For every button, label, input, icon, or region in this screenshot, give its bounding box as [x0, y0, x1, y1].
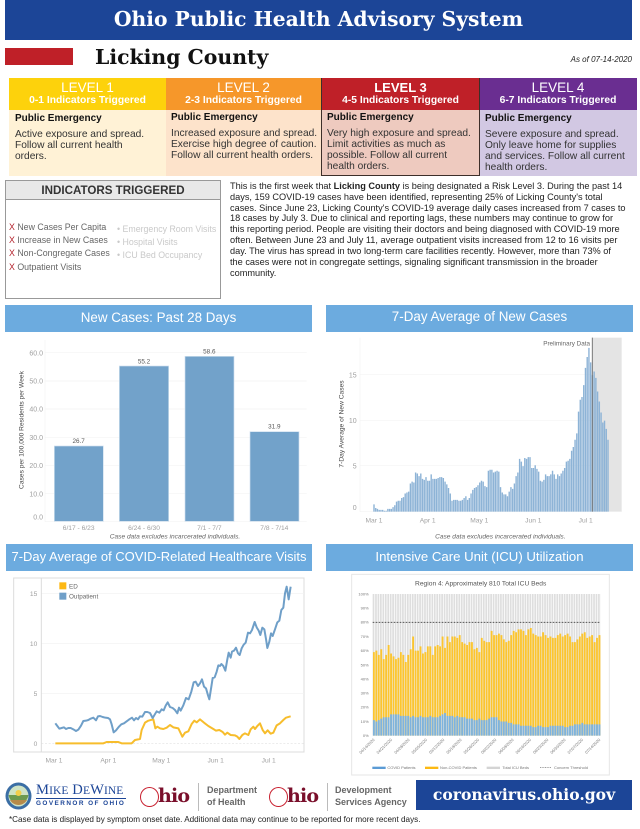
x axis labels: Apr 1 — [100, 758, 117, 765]
y axis labels: 15 — [349, 372, 357, 379]
x axis labels: Mar 1 — [365, 518, 383, 525]
summary paragraph — [230, 181, 626, 278]
level 4 column: Only leave home for supplies — [485, 140, 616, 151]
governor logo text: GOVERNOR OF OHIO — [36, 800, 125, 807]
level 1 column — [9, 78, 166, 176]
footnote: *Case data is displayed by symptom onset date. Additional data may continue to be reported for more recent days. — [9, 815, 420, 824]
y axis labels: 50% — [361, 662, 369, 667]
chart note: Case data excludes incarcerated individuals. — [110, 534, 240, 541]
x axis labels: 7/1 - 7/7 — [197, 525, 222, 532]
summary paragraph: cases. Since June 23, Licking County's COVID-19 average daily cases increased from 7 cases to — [230, 203, 625, 213]
bar value labels: 31.9 — [268, 424, 281, 431]
legend: Concern Threshold — [554, 765, 588, 770]
level 2 column: Public Emergency — [171, 112, 258, 123]
preliminary data marker: Preliminary Data — [543, 340, 590, 347]
level 2 column — [166, 78, 321, 176]
level 3 column (current level, outlined): Public Emergency — [327, 112, 414, 123]
y axis labels: 0% — [363, 733, 369, 738]
triggered indicators list — [9, 222, 110, 272]
date axis labels: 06/16/2020 — [514, 737, 533, 755]
level 4 column: 6-7 Indicators Triggered — [500, 95, 616, 106]
date axis labels: 07/07/2020 — [566, 737, 585, 755]
level 4 column: Public Emergency — [485, 113, 572, 124]
x axis labels: Jul 1 — [262, 758, 276, 765]
bar value labels: 26.7 — [73, 438, 85, 445]
summary paragraph: This is the first week that Licking County is being designated a Risk Level 3. During the past 14 — [230, 181, 622, 191]
occupied bed bars — [374, 628, 599, 736]
level 1 column: Active exposure and spread. — [15, 129, 144, 140]
date axis labels: 05/26/2020 — [462, 737, 481, 755]
bar value labels — [73, 348, 281, 445]
level 3 column (current level, outlined) — [321, 78, 480, 176]
level 3 column (current level, outlined): Limit activities as much as — [327, 139, 445, 150]
level 3 column (current level, outlined): Very high exposure and spread. — [327, 128, 471, 139]
Ohio Development Services Agency logo: Services Agency — [335, 796, 407, 806]
y axis labels: 70% — [361, 634, 369, 639]
triggered indicators list: X Non-Congregate Cases — [9, 248, 110, 258]
y axis labels — [29, 350, 43, 522]
level 1 column: orders. — [15, 151, 47, 162]
governor logo text: MIKE DEWINE — [36, 782, 123, 798]
daily bars — [374, 348, 608, 512]
level 4 column — [479, 78, 637, 176]
level 3 column (current level, outlined): health orders. — [327, 161, 389, 172]
level 3 column (current level, outlined): 4-5 Indicators Triggered — [342, 95, 459, 106]
y axis title: 7-Day Average of New Cases — [338, 380, 345, 468]
y axis title: Cases per 100,000 Residents per Week — [18, 370, 25, 489]
heading: ICU utilization — [326, 544, 633, 571]
series: ED — [55, 716, 291, 743]
Ohio Development Services Agency logo — [269, 783, 407, 811]
summary paragraph: 18 cases by July 3. Due to clinical and reporting lags, these numbers may continue to grow for — [230, 213, 613, 223]
chart note: Case data excludes incarcerated individuals. — [435, 534, 566, 541]
y axis labels: 80% — [361, 620, 369, 625]
heading: 7-day average: 7-Day Average of New Cases — [392, 309, 567, 324]
governor logo text — [36, 782, 126, 807]
y axis labels: 10 — [349, 418, 357, 425]
y axis labels: 5 — [353, 463, 357, 470]
date axis labels: 06/23/2020 — [532, 737, 550, 755]
level 4 column: and services. Follow all current — [485, 151, 625, 162]
preliminary data shading — [592, 338, 622, 512]
x axis labels: Mar 1 — [45, 758, 63, 765]
y axis labels: 20% — [361, 705, 369, 710]
icon: Ohio governor seal — [6, 782, 32, 810]
bar chart: new cases past 28 days — [18, 348, 306, 541]
date axis labels: 04/14/2020 — [358, 737, 376, 755]
legend: Outpatient — [69, 593, 98, 600]
not triggered indicators list — [117, 224, 216, 260]
not triggered indicators list: • Hospital Visits — [117, 237, 178, 247]
stacked bar chart: ICU utilization — [351, 574, 610, 776]
x axis labels: Jun 1 — [525, 518, 542, 525]
x axis labels — [63, 525, 289, 532]
title banner: Ohio Public Health Advisory System — [114, 7, 523, 31]
level 1 column: LEVEL 1 — [61, 80, 114, 95]
risk level colour swatch — [5, 48, 73, 65]
chart title: Region 4: Approximately 810 Total ICU Beds — [415, 580, 547, 587]
non-COVID patients — [374, 628, 599, 736]
heading: healthcare visits — [6, 544, 312, 571]
legend: Non-COVID Patients — [440, 765, 477, 770]
series: outpatient — [55, 587, 291, 732]
y axis labels: 30.0 — [29, 435, 43, 442]
as-of date: As of 07-14-2020 — [571, 55, 632, 64]
triggered indicators list: X Increase in New Cases — [9, 235, 108, 245]
heading: 7-day average — [326, 305, 633, 332]
summary paragraph: the cases were not in congregate settings, signaling significant transmission in the broader — [230, 257, 598, 267]
summary paragraph: often. Between June 23 and July 11, average outpatient visits increased from 12 to 16 visits per — [230, 235, 617, 245]
not triggered indicators list: • ICU Bed Occupancy — [117, 250, 202, 260]
level 3 column (current level, outlined): LEVEL 3 — [374, 80, 427, 95]
date axis labels: 05/05/2020 — [410, 737, 429, 755]
x axis labels — [45, 758, 276, 765]
date axis labels: 06/30/2020 — [549, 737, 567, 755]
y axis labels: 100% — [358, 591, 369, 596]
line chart: healthcare visits — [13, 578, 304, 765]
x axis labels: 6/17 - 6/23 — [63, 525, 95, 532]
x axis labels — [365, 518, 593, 525]
level 2 column: 2-3 Indicators Triggered — [185, 95, 302, 106]
bars — [54, 356, 299, 521]
triggered indicators list: X Outpatient Visits — [9, 262, 81, 272]
level 1 column: 0-1 Indicators Triggered — [29, 95, 146, 106]
website banner — [416, 780, 632, 810]
panel: advisory levels — [9, 78, 637, 176]
heading: healthcare visits: 7-Day Average of COVID-Related Healthcare Visits — [11, 549, 307, 564]
level 4 column: health orders. — [485, 162, 547, 173]
indicators heading: INDICATORS TRIGGERED — [41, 184, 185, 197]
y axis labels: 40.0 — [29, 407, 43, 414]
x axis labels: Jul 1 — [579, 518, 593, 525]
date axis labels: 06/02/2020 — [480, 737, 498, 755]
y axis labels: 90% — [361, 606, 369, 611]
level 1 column: Follow all current health — [15, 140, 123, 151]
legend — [372, 765, 588, 770]
total ICU beds bars — [373, 452, 601, 829]
Ohio Department of Health logo: hio — [158, 785, 189, 807]
y axis labels: 0.0 — [33, 515, 43, 522]
indicators heading — [6, 181, 220, 200]
legend: ED — [69, 583, 78, 590]
summary paragraph: days, 159 COVID-19 cases have been identified, representing 25% of Licking County's total — [230, 192, 603, 202]
date axis labels: 05/19/2020 — [445, 737, 463, 755]
y axis labels: 15 — [30, 591, 38, 598]
date axis labels: 04/28/2020 — [393, 737, 411, 755]
y axis labels: 40% — [361, 676, 369, 681]
y axis labels: 10% — [361, 719, 369, 724]
x axis labels: Jun 1 — [208, 758, 224, 765]
level 4 column: LEVEL 4 — [532, 80, 584, 95]
Ohio Development Services Agency logo: Development — [335, 785, 392, 795]
level 2 column: Exercise high degree of caution. — [171, 139, 317, 150]
website banner: coronavirus.ohio.gov — [433, 785, 615, 804]
triggered indicators list: X New Cases Per Capita — [9, 222, 106, 232]
x axis labels: 6/24 - 6/30 — [128, 525, 160, 532]
y axis labels — [349, 372, 357, 512]
concern threshold line — [373, 621, 601, 624]
date axis labels: 05/12/2020 — [428, 737, 446, 755]
y axis labels: 50.0 — [29, 379, 43, 386]
y axis labels: 10.0 — [29, 491, 43, 498]
legend — [59, 582, 98, 600]
x axis labels: May 1 — [152, 758, 171, 765]
y axis labels: 60% — [361, 648, 369, 653]
title banner — [5, 0, 632, 40]
county name heading: Licking County — [95, 45, 268, 69]
heading: ICU utilization: Intensive Care Unit (ICU) Utilization — [375, 549, 584, 564]
x axis labels: 7/8 - 7/14 — [260, 525, 289, 532]
level 2 column: LEVEL 2 — [217, 80, 270, 95]
date axis labels — [358, 737, 602, 755]
summary paragraph: community. — [230, 268, 276, 278]
not triggered indicators list: • Emergency Room Visits — [117, 224, 216, 234]
level 1 column: Public Emergency — [15, 113, 102, 124]
x axis labels: Apr 1 — [420, 518, 436, 525]
Ohio Department of Health logo — [140, 783, 257, 811]
summary paragraph: day. The virus has spread in two long-term care facilities recently. However, more than 73% of — [230, 246, 611, 256]
summary paragraph: this reporting period. People are visiting their doctors and being diagnosed with COVID-19 more — [230, 224, 620, 234]
Ohio Department of Health logo: Department — [207, 785, 257, 795]
panel: indicators triggered — [5, 180, 221, 299]
legend: Total ICU Beds — [502, 765, 529, 770]
bar value labels: 55.2 — [138, 358, 151, 365]
Ohio Department of Health logo: of Health — [207, 796, 246, 806]
date axis labels: 04/21/2020 — [375, 737, 394, 755]
level 4 column: Severe exposure and spread. — [485, 129, 619, 140]
y axis labels: 60.0 — [29, 350, 43, 357]
date axis labels: 06/09/2020 — [497, 737, 515, 755]
y axis labels: 0 — [353, 505, 357, 512]
level 3 column (current level, outlined): possible. Follow all current — [327, 150, 447, 161]
y axis labels: 30% — [361, 691, 369, 696]
y axis labels — [30, 591, 38, 748]
y axis labels: 10 — [30, 641, 38, 648]
COVID patients — [374, 713, 599, 736]
bar chart: 7-day average of new cases — [338, 338, 622, 541]
level 2 column: Increased exposure and spread. — [171, 128, 317, 139]
Ohio Development Services Agency logo: hio — [287, 785, 318, 807]
heading: new cases — [5, 305, 312, 332]
y axis labels: 5 — [34, 691, 38, 698]
y axis labels — [358, 591, 369, 738]
x axis labels: May 1 — [470, 518, 489, 525]
bar value labels: 58.6 — [203, 348, 216, 355]
level 2 column: Follow all current health orders. — [171, 150, 313, 161]
y axis labels: 20.0 — [29, 463, 43, 470]
y axis labels: 0 — [34, 741, 38, 748]
legend: COVID Patients — [387, 765, 416, 770]
date axis labels: 07/14/2020 — [584, 737, 602, 755]
heading: new cases: New Cases: Past 28 Days — [81, 310, 236, 325]
